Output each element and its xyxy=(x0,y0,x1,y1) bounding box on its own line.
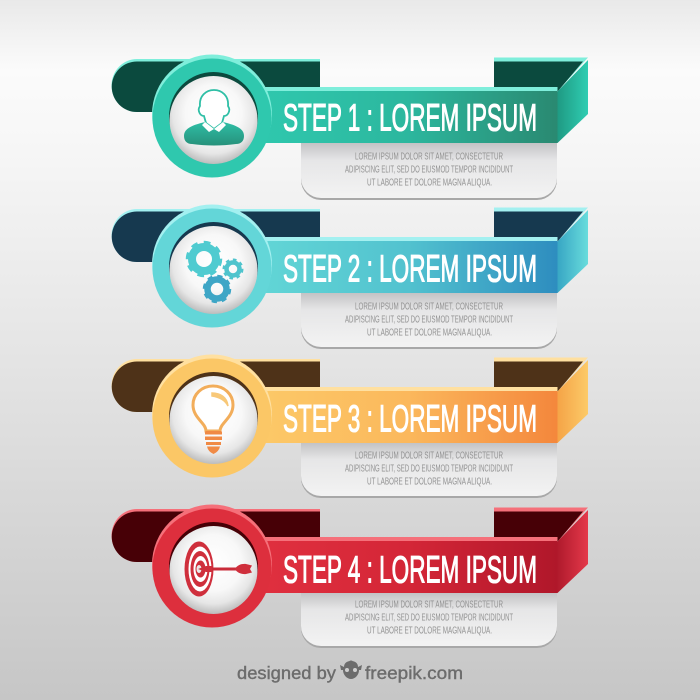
description text: UT LABORE ET DOLORE MAGNA ALIQUA. xyxy=(367,178,492,188)
icon: light bulb xyxy=(193,386,233,454)
globe xyxy=(169,222,258,311)
description text: ADIPISCING ELIT, SED DO EIUSMOD TEMPOR INCIDIDUNT xyxy=(345,314,513,326)
description card xyxy=(301,590,557,648)
ribbon fold xyxy=(558,510,588,593)
back band left xyxy=(112,59,320,112)
back band right xyxy=(494,208,588,241)
description text: UT LABORE ET DOLORE MAGNA ALIQUA. xyxy=(367,626,492,636)
ring xyxy=(152,504,272,624)
description text: LOREM IPSUM DOLOR SIT AMET, CONSECTETUR xyxy=(355,600,503,610)
ribbon fold xyxy=(558,60,588,143)
back band left xyxy=(112,359,320,412)
panel: step 4 xyxy=(112,504,588,648)
ribbon xyxy=(258,87,558,143)
description text: UT LABORE ET DOLORE MAGNA ALIQUA. xyxy=(367,476,492,488)
back band left xyxy=(112,509,320,562)
description card xyxy=(301,290,557,349)
back band right xyxy=(494,58,588,91)
ring xyxy=(152,204,272,324)
description text: LOREM IPSUM DOLOR SIT AMET, CONSECTETUR xyxy=(355,302,503,312)
description text: UT LABORE ET DOLORE MAGNA ALIQUA. xyxy=(367,328,492,338)
panel: step 1 xyxy=(112,54,588,200)
ribbon fold xyxy=(558,360,588,443)
ring xyxy=(152,354,272,474)
heading: STEP 2 : LOREM IPSUM xyxy=(283,248,537,290)
description text: ADIPISCING ELIT, SED DO EIUSMOD TEMPOR INCIDIDUNT xyxy=(345,164,513,176)
globe xyxy=(169,522,258,611)
ribbon xyxy=(258,237,558,293)
back band right xyxy=(494,508,588,541)
description text: LOREM IPSUM DOLOR SIT AMET, CONSECTETUR xyxy=(355,450,503,462)
credit text left: designed by xyxy=(237,663,336,683)
description text: ADIPISCING ELIT, SED DO EIUSMOD TEMPOR INCIDIDUNT xyxy=(345,464,513,474)
credit text right: freepik.com xyxy=(365,663,463,683)
ribbon xyxy=(258,537,558,593)
ring xyxy=(152,54,272,174)
heading: STEP 3 : LOREM IPSUM xyxy=(283,398,537,440)
ribbon fold xyxy=(558,210,588,293)
back band left xyxy=(112,209,320,262)
icon: person xyxy=(184,90,244,146)
panel: step 2 xyxy=(112,204,588,349)
panel: step 3 xyxy=(112,354,588,498)
footer credit xyxy=(237,660,463,683)
globe xyxy=(169,372,258,461)
description card xyxy=(301,140,557,200)
heading: STEP 1 : LOREM IPSUM xyxy=(283,98,537,140)
description text: ADIPISCING ELIT, SED DO EIUSMOD TEMPOR INCIDIDUNT xyxy=(345,612,513,624)
ribbon xyxy=(258,387,558,443)
icon: gears xyxy=(188,243,242,302)
globe xyxy=(169,72,258,161)
icon: freepik logo xyxy=(340,660,362,679)
back band right xyxy=(494,358,588,391)
description card xyxy=(301,440,557,498)
description text: LOREM IPSUM DOLOR SIT AMET, CONSECTETUR xyxy=(355,152,503,162)
heading: STEP 4 : LOREM IPSUM xyxy=(283,550,537,592)
icon: target and dart xyxy=(184,542,252,596)
